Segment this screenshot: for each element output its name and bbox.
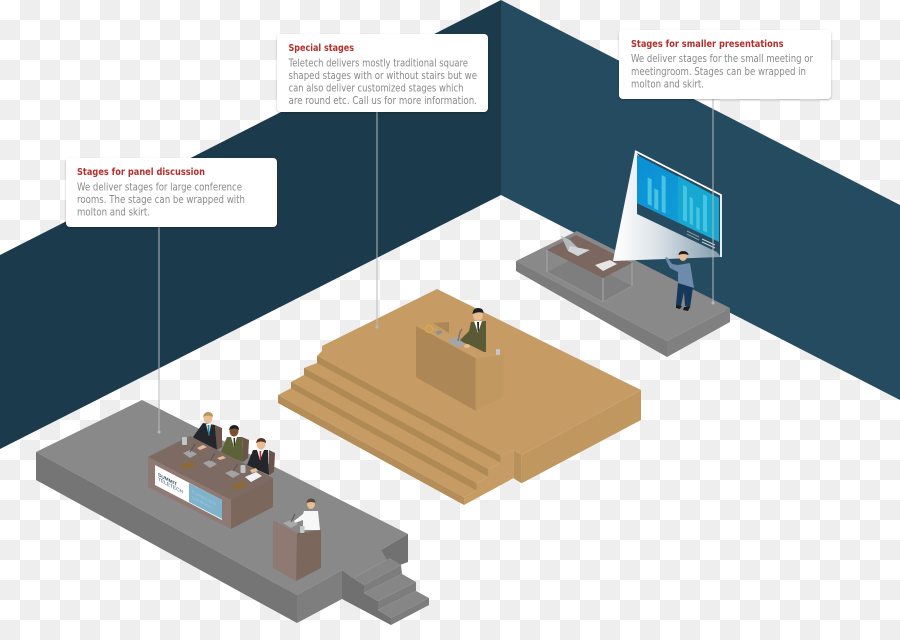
panel table with three speakers — [148, 412, 275, 529]
connector line: special — [376, 112, 378, 328]
projected screen — [635, 151, 721, 257]
connector line: smaller — [712, 98, 714, 304]
heading: Special stages — [288, 43, 354, 54]
person 1 — [193, 412, 222, 450]
special stage — [278, 289, 641, 505]
person 2 — [217, 425, 249, 462]
table sign — [155, 465, 222, 520]
projector — [595, 260, 617, 271]
laptop — [561, 236, 590, 256]
right wall — [501, 0, 900, 400]
body text: can also deliver customized stages which — [288, 84, 464, 94]
speaker — [460, 308, 486, 353]
podium mic and glass — [283, 514, 304, 533]
body text: Teletech delivers mostly traditional square — [288, 58, 468, 70]
body text — [631, 54, 814, 90]
heading: Stages for panel discussion — [77, 167, 205, 178]
body text — [288, 58, 477, 107]
lectern box — [416, 324, 503, 411]
person 3 — [247, 438, 275, 475]
body text: meetingroom. Stages can be wrapped in — [631, 67, 806, 78]
presenter — [665, 251, 694, 311]
small presentation stage — [516, 231, 730, 357]
callout: smaller presentations — [619, 30, 831, 99]
body text: molton and skirt. — [631, 80, 704, 90]
body text: rooms. The stage can be wrapped with — [77, 195, 245, 206]
body text: We deliver stages for large conference — [77, 182, 242, 194]
desk with laptop — [547, 235, 632, 302]
body text — [77, 182, 245, 218]
bar chart on screen — [648, 175, 707, 233]
table sign: SUMMIT — [158, 472, 178, 488]
body text: are round etc. Call us for more information. — [288, 96, 477, 107]
podium box — [273, 520, 321, 581]
body text: molton and skirt. — [77, 208, 150, 218]
podium with speaker in white shirt — [273, 498, 321, 581]
projection beam — [613, 151, 721, 261]
lectern items — [426, 326, 500, 355]
table sign: Konference — [192, 489, 217, 508]
body text: shaped stages with or without stairs but we — [288, 71, 477, 82]
screen footer text — [687, 231, 715, 248]
heading: Stages for smaller presentations — [631, 39, 784, 50]
panel discussion stage — [36, 400, 429, 625]
table sign: TELETECH — [158, 477, 183, 496]
table sign: solutions — [192, 495, 211, 511]
table — [148, 436, 273, 529]
lectern with speaker on special stage — [416, 308, 503, 411]
connector line: panel — [158, 226, 160, 434]
body text: We deliver stages for the small meeting or — [631, 54, 814, 65]
callout: panel discussion — [66, 158, 277, 227]
callout: special stages — [277, 34, 488, 112]
table items — [180, 437, 262, 490]
left wall — [0, 0, 501, 449]
speaker — [294, 498, 320, 530]
stairs of panel stage — [342, 558, 429, 625]
tan stairs — [278, 356, 501, 505]
